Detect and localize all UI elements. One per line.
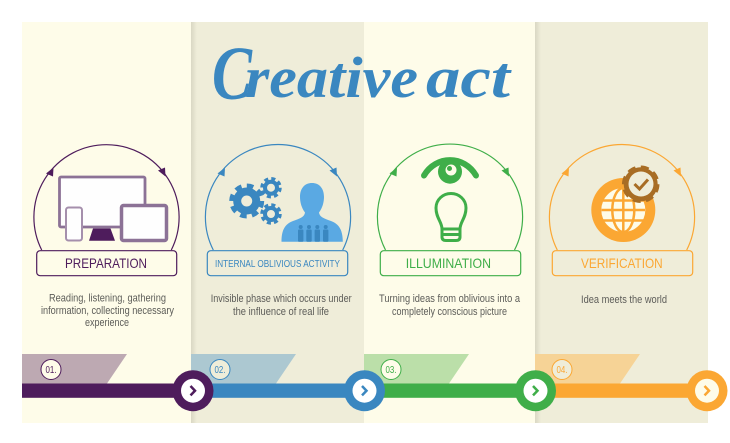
panel: internal oblivious activity <box>205 144 352 318</box>
step 03 ribbon: 03. <box>386 365 396 376</box>
description: verification: Idea meets the world <box>581 294 667 306</box>
description: preparation: Reading, listening, gathering <box>49 292 166 304</box>
description: illumination: Turning ideas from oblivious into a <box>379 293 521 305</box>
cycle arc: preparation <box>34 145 179 250</box>
icon: gears <box>232 179 280 223</box>
description: illumination <box>379 293 521 318</box>
title: reative <box>245 45 418 110</box>
label: internal oblivious activity <box>207 251 348 276</box>
label: internal oblivious activity: INTERNAL OBLIVIOUS ACTIVITY <box>215 258 340 270</box>
label: illumination: ILLUMINATION <box>406 255 491 271</box>
description: illumination: completely conscious picture <box>392 306 507 318</box>
description: internal oblivious activity: the influence of real life <box>233 306 329 318</box>
step 04 ribbon <box>535 354 640 384</box>
description: internal oblivious activity: Invisible phase which occurs under <box>211 293 352 305</box>
title: act <box>426 45 512 110</box>
description: internal oblivious activity <box>211 293 352 318</box>
cycle arc: internal oblivious activity <box>205 144 351 250</box>
title <box>212 32 512 116</box>
step 02 ribbon: 02. <box>214 365 226 376</box>
icon: devices <box>60 177 166 241</box>
step 01 ribbon: 01. <box>46 365 56 376</box>
timeline <box>22 354 728 411</box>
label: preparation <box>37 251 177 276</box>
icon: verified badge <box>624 167 658 201</box>
icon: globe <box>591 178 655 242</box>
node 1 <box>172 370 214 411</box>
node 2 <box>344 370 385 411</box>
icon: eye <box>424 160 476 184</box>
label: verification: VERIFICATION <box>581 255 663 271</box>
label: verification <box>552 251 693 276</box>
title: C <box>212 32 253 116</box>
description: preparation: experience <box>85 317 129 329</box>
cycle arc: verification <box>549 144 695 250</box>
step 03 ribbon <box>364 354 469 384</box>
node 4 <box>686 370 728 411</box>
description: preparation <box>41 292 174 329</box>
progress bars <box>22 384 707 398</box>
step 01 ribbon <box>22 354 127 384</box>
description: preparation: information, collecting necessary <box>41 305 174 317</box>
step 04 ribbon: 04. <box>556 365 568 376</box>
icon: light bulb <box>436 194 466 240</box>
node 3 <box>515 370 556 411</box>
step 02 ribbon <box>191 354 296 384</box>
panel: verification <box>549 144 695 306</box>
panel: illumination <box>377 144 523 318</box>
label: illumination <box>380 251 521 276</box>
cycle arc: illumination <box>377 144 523 250</box>
panel: preparation <box>34 145 179 329</box>
label: preparation: PREPARATION <box>65 255 147 271</box>
icon: person with crowd <box>282 183 343 242</box>
